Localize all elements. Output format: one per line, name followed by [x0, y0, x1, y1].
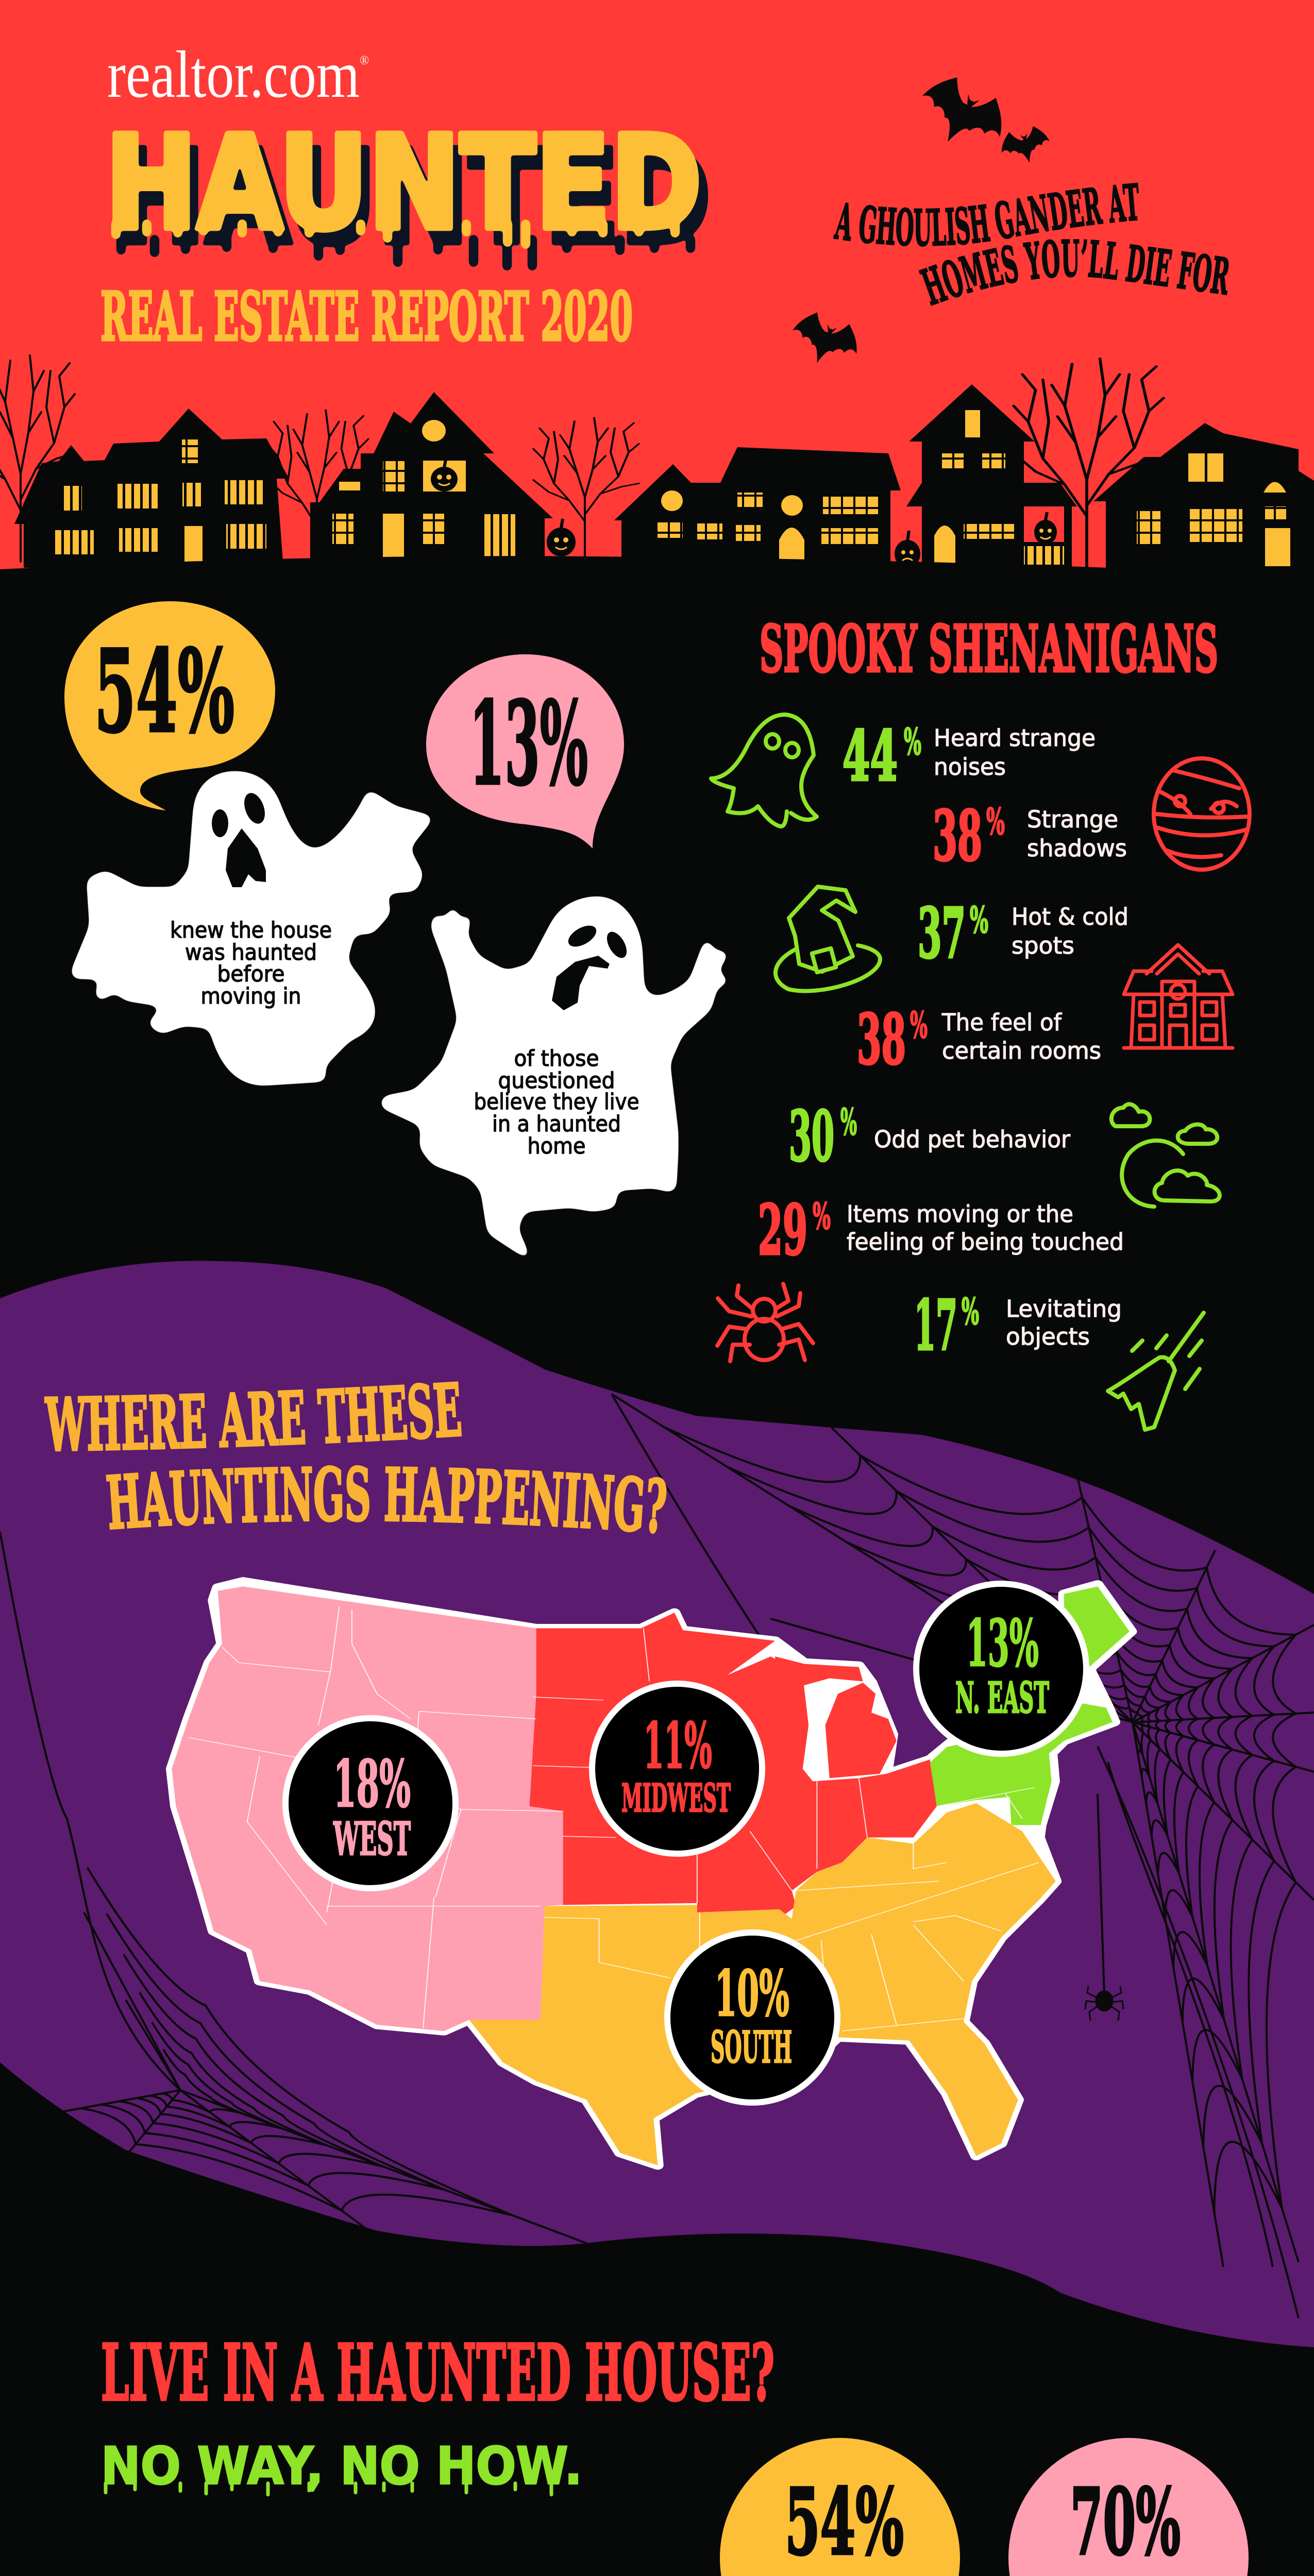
stat row: 38% feel of certain rooms: The feel of [941, 1009, 1062, 1036]
stat oval: 54% of men: 54% [785, 2468, 904, 2575]
ghost 1 caption: before [217, 961, 284, 987]
stat oval: 70% of women [1008, 2438, 1249, 2576]
stat row: 37% hot and cold spots: 37 [918, 893, 966, 974]
speech bubble 54%: 54% [94, 624, 234, 758]
header panel: REAL ESTATE REPORT 2020 [100, 277, 633, 356]
red sky [0, 0, 1314, 572]
region badge: south 10%: 10% [715, 1956, 789, 2030]
title: HAUNTED: HAUNTED [105, 108, 702, 258]
region badge: south 10% [667, 1933, 837, 2103]
stat row: 44% heard strange noises [843, 716, 1096, 796]
region: midwest [530, 1613, 937, 1919]
header panel [0, 0, 1314, 569]
stat row: 38% feel of certain rooms [857, 999, 1101, 1080]
state borders [189, 1606, 1039, 2031]
stat row: 29% items moving [758, 1190, 1124, 1270]
stat row: 44% heard strange noises: % [904, 720, 921, 763]
panel: ghost statistics [64, 601, 732, 1261]
heading: HAUNTINGS HAPPENING? [106, 1465, 667, 1534]
stat row: 38% strange shadows: Strange [1027, 806, 1118, 833]
purple background shape [0, 1261, 1314, 2347]
stat row: 38% feel of certain rooms: % [910, 1004, 928, 1046]
stat oval: 54% of men [720, 2438, 960, 2576]
logo: realtor.com: ® [360, 54, 369, 67]
heading [44, 1381, 667, 1534]
stat row: 17% levitating objects [914, 1285, 1122, 1366]
region badge: midwest 11%: 11% [644, 1708, 712, 1783]
stat row: 17% levitating objects: 17 [914, 1285, 957, 1366]
speech bubble 54% [64, 601, 275, 810]
stat row: 30% odd pet behavior: 30 [789, 1096, 834, 1177]
panel: where are these hauntings happening [0, 1261, 1314, 2347]
speech bubble 13%: 13% [469, 677, 588, 811]
stat row: 30% odd pet behavior: Odd pet behavior [874, 1126, 1070, 1153]
region badge: west 18%: 18% [333, 1747, 411, 1822]
region badge: midwest 11%: MIDWEST [621, 1775, 731, 1821]
stat row: 17% levitating objects: Levitating [1006, 1295, 1122, 1323]
lit windows [55, 410, 1290, 566]
pumpkins [431, 460, 1057, 568]
tagline curved text [833, 182, 1228, 306]
logo: realtor.com: realtor.com [107, 38, 360, 112]
ghost 2 caption [474, 1046, 639, 1159]
heading: WHERE ARE THESE [44, 1381, 462, 1452]
spider on thread [1085, 1794, 1123, 2021]
bats in the sky [785, 67, 1053, 375]
stat row: 44% heard strange noises: Heard strange [934, 724, 1096, 752]
tagline curved text: HOMES YOU’LL DIE FOR [918, 239, 1228, 306]
region badge: west 18%: WEST [333, 1812, 411, 1866]
ghost 1 caption [170, 918, 332, 1009]
stat row: 37% hot and cold spots: % [970, 899, 988, 941]
panel: live in a haunted house [0, 2328, 1261, 2576]
icon: broom [1108, 1313, 1204, 1430]
ghost 2 caption: believe they live [474, 1089, 639, 1115]
US map [172, 1582, 1131, 2165]
stat row: 38% strange shadows: % [986, 800, 1005, 843]
stat oval: 70% of women: 70% [1070, 2468, 1181, 2575]
stat row: 38% strange shadows: 38 [933, 796, 982, 876]
stat row: 37% hot and cold spots [918, 893, 1128, 974]
icon: witch hat [776, 887, 880, 991]
panel: spooky shenanigans [711, 612, 1250, 1430]
stat row: 38% strange shadows: shadows [1027, 835, 1127, 862]
region badge: northeast 13%: 13% [966, 1606, 1039, 1681]
region: south [469, 1803, 1056, 2165]
speech bubble 13% [426, 654, 624, 849]
icon: ghost outline [711, 715, 817, 826]
stat row: 38% strange shadows [933, 796, 1127, 876]
house silhouettes [14, 384, 1314, 568]
stat row: 44% heard strange noises: noises [934, 753, 1006, 781]
ghost 2 caption: in a haunted [492, 1111, 621, 1137]
icon: moon and clouds [1111, 1104, 1220, 1207]
bare trees [0, 355, 1164, 569]
ghost 1 caption: knew the house [170, 918, 332, 943]
ghost 1 [71, 771, 435, 1086]
stat row: 30% odd pet behavior [789, 1096, 1070, 1177]
ghost 2 [380, 896, 732, 1261]
region badge: northeast 13% [916, 1584, 1086, 1754]
region badge: west 18% [285, 1718, 456, 1888]
region: west [172, 1586, 563, 2031]
stat row: 17% levitating objects: % [962, 1290, 979, 1333]
region badge: midwest 11% [592, 1684, 762, 1854]
stat row: 17% levitating objects: objects [1006, 1323, 1090, 1350]
ground [0, 556, 1314, 629]
stat row: 29% items moving: feeling of being touched [847, 1228, 1124, 1256]
ghost 1 caption: moving in [201, 984, 301, 1009]
ghost 1 caption: was haunted [185, 940, 317, 965]
stat row: 38% feel of certain rooms: 38 [857, 999, 906, 1080]
spider webs [0, 1394, 1314, 2318]
stat row: 30% odd pet behavior: % [840, 1100, 857, 1143]
stat row: 29% items moving: 29 [758, 1190, 807, 1270]
subheading: NO WAY, NO HOW. [101, 2436, 582, 2496]
map outline [172, 1582, 1131, 2165]
icon: mummy head [1154, 758, 1250, 870]
ghost 2 caption: questioned [498, 1068, 615, 1094]
icon: house outline [1124, 945, 1233, 1048]
stat row: 37% hot and cold spots: spots [1012, 932, 1074, 959]
stat row: 29% items moving: Items moving or the [847, 1200, 1073, 1228]
region: northeast [930, 1586, 1130, 1825]
stat row: 38% feel of certain rooms: certain rooms [942, 1037, 1101, 1064]
stat row: 37% hot and cold spots: Hot & cold [1012, 903, 1128, 930]
region badge: northeast 13%: N. EAST [955, 1673, 1049, 1723]
stat row: 44% heard strange noises: 44 [843, 716, 898, 796]
ghost 2 caption: home [528, 1133, 585, 1159]
title: HAUNTED: HAUNTED [113, 123, 711, 273]
tagline curved text: A GHOULISH GANDER AT [833, 182, 1139, 247]
ghost 2 caption: of those [514, 1046, 599, 1072]
icon: spider [717, 1284, 813, 1361]
region badge: south 10%: SOUTH [711, 2022, 792, 2073]
stat row: 29% items moving: % [813, 1195, 831, 1238]
